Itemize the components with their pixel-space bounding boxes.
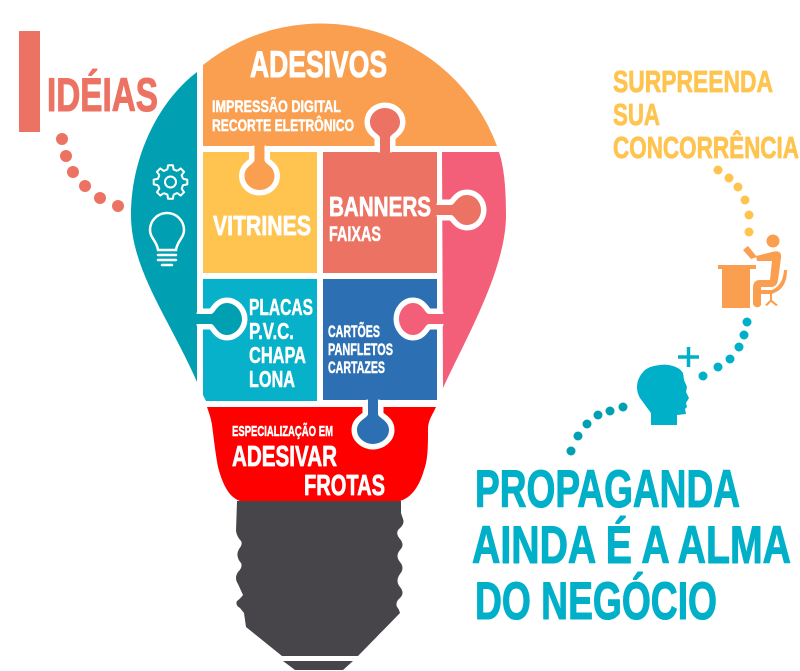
text: placas: CHAPA	[249, 342, 306, 368]
puzzle tab: pink into blue	[399, 303, 444, 335]
text: adesivos: IMPRESSÃO DIGITAL	[212, 96, 341, 116]
icon: gear	[154, 165, 187, 199]
icon: person at desk	[718, 234, 787, 308]
text: adesivos: ADESIVOS	[250, 44, 387, 85]
text: placas: P.V.C.	[249, 318, 294, 344]
text: adesivos: RECORTE ELETRÔNICO	[212, 116, 354, 135]
puzzle tab: teal into cyan	[196, 303, 242, 335]
puzzle tab: blue into red	[357, 399, 389, 444]
panel: blue cartoes piece	[323, 279, 437, 400]
dotted arrow: teal lower	[566, 402, 628, 456]
text: cartoes: CARTAZES	[328, 358, 385, 377]
text: placas	[249, 294, 313, 392]
text: surpreenda sua concorrencia: SUA	[613, 97, 660, 132]
panel: pink right bulb piece	[442, 152, 506, 388]
dotted arrow: teal upper	[698, 318, 752, 380]
icon: small light bulb	[150, 213, 184, 265]
text: frotas: ESPECIALIZAÇÃO EM	[232, 422, 333, 440]
puzzle tab: coral into pink	[436, 195, 481, 225]
text: placas: LONA	[249, 366, 295, 392]
text: cartoes: PANFLETOS	[328, 340, 393, 359]
puzzle tab: coral into orange	[370, 108, 400, 153]
panel: yellow vitrines piece	[203, 152, 317, 273]
panel: coral banners piece	[323, 152, 437, 273]
text: frotas: ADESIVAR	[232, 441, 337, 473]
text: banners: BANNERS	[329, 191, 431, 222]
heading: Idéias: IDÉIAS	[47, 68, 158, 121]
text: vitrines: VITRINES	[213, 210, 311, 241]
text: cartoes: CARTÕES	[328, 321, 380, 341]
puzzle tab: orange into yellow	[244, 145, 274, 190]
icon: head silhouette	[637, 365, 689, 425]
text: surpreenda sua concorrencia	[613, 64, 799, 165]
heading: Idéias	[19, 31, 158, 132]
panel: cyan placas piece	[203, 279, 317, 401]
icon: plus sign	[678, 347, 699, 367]
text: propaganda ainda e a alma do negocio	[472, 460, 791, 631]
text: cartoes	[328, 321, 393, 377]
text: frotas	[232, 422, 385, 502]
text: adesivos	[212, 44, 387, 135]
dotted arrow: yellow	[714, 166, 754, 236]
dotted arrow: coral	[56, 133, 124, 212]
panel: red frotas piece	[207, 407, 436, 501]
text: banners: FAIXAS	[329, 223, 381, 246]
panel: orange adesivos piece	[203, 24, 497, 146]
text: placas: PLACAS	[249, 294, 313, 320]
text: frotas: FROTAS	[304, 470, 385, 502]
text: banners	[329, 191, 431, 246]
panel: teal left bulb piece	[131, 72, 197, 382]
bulb screw base	[236, 501, 404, 670]
